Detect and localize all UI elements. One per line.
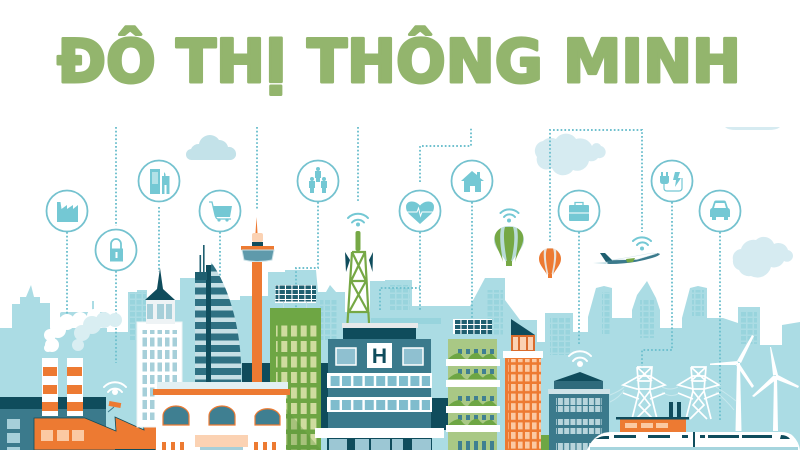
dotted connector lines bbox=[67, 127, 720, 422]
lower white arched building bbox=[153, 382, 290, 450]
wifi signal above tower bbox=[348, 214, 368, 226]
airplane bbox=[593, 253, 660, 264]
wind turbine right bbox=[752, 347, 799, 431]
green hot air balloon bbox=[494, 226, 524, 266]
solar panel on green building bbox=[275, 285, 316, 308]
icon: padlock bbox=[96, 230, 136, 270]
security camera and wifi bbox=[104, 382, 126, 412]
icon: factory bbox=[46, 190, 88, 232]
electricity pylon left bbox=[623, 367, 665, 419]
orange building bbox=[503, 319, 543, 450]
small orange power station bbox=[616, 402, 689, 433]
white skyscraper bbox=[137, 268, 182, 427]
green balcony building bbox=[446, 339, 500, 450]
icon: car bbox=[700, 190, 740, 232]
title: ĐÔ THỊ THÔNG MINH bbox=[57, 26, 741, 97]
wifi signal above right building bbox=[569, 351, 591, 367]
sail-shaped teal tower bbox=[195, 245, 241, 382]
orange hot air balloon bbox=[539, 248, 561, 278]
skyline bbox=[0, 270, 800, 450]
power lines bbox=[610, 387, 736, 410]
green building bbox=[270, 308, 321, 450]
icon: house bbox=[452, 160, 492, 202]
icon: office buildings bbox=[138, 160, 180, 202]
wifi signal above green balloon bbox=[500, 209, 518, 222]
solar panel on balcony building bbox=[453, 319, 492, 334]
icon: shopping cart bbox=[200, 190, 240, 232]
observation tower bbox=[241, 217, 274, 384]
left teal building bbox=[0, 397, 106, 450]
green communications tower bbox=[345, 231, 373, 323]
hospital bbox=[315, 323, 449, 450]
wifi signal above plane bbox=[633, 237, 651, 250]
icon: plug and lightning bbox=[652, 160, 692, 202]
wind turbine left bbox=[710, 335, 754, 431]
factory smoke bbox=[44, 309, 122, 352]
electricity pylon right bbox=[678, 367, 719, 419]
high-speed train bbox=[587, 432, 800, 450]
icon: people network bbox=[298, 160, 338, 202]
clouds bbox=[186, 127, 793, 278]
orange factory bbox=[34, 417, 158, 450]
grass strip bbox=[541, 435, 551, 450]
teal right building bbox=[548, 372, 610, 450]
factory chimneys bbox=[42, 358, 83, 416]
hospital sign letter: H bbox=[372, 345, 387, 368]
icon: heart monitor bbox=[400, 190, 440, 232]
icon: briefcase bbox=[558, 190, 600, 232]
